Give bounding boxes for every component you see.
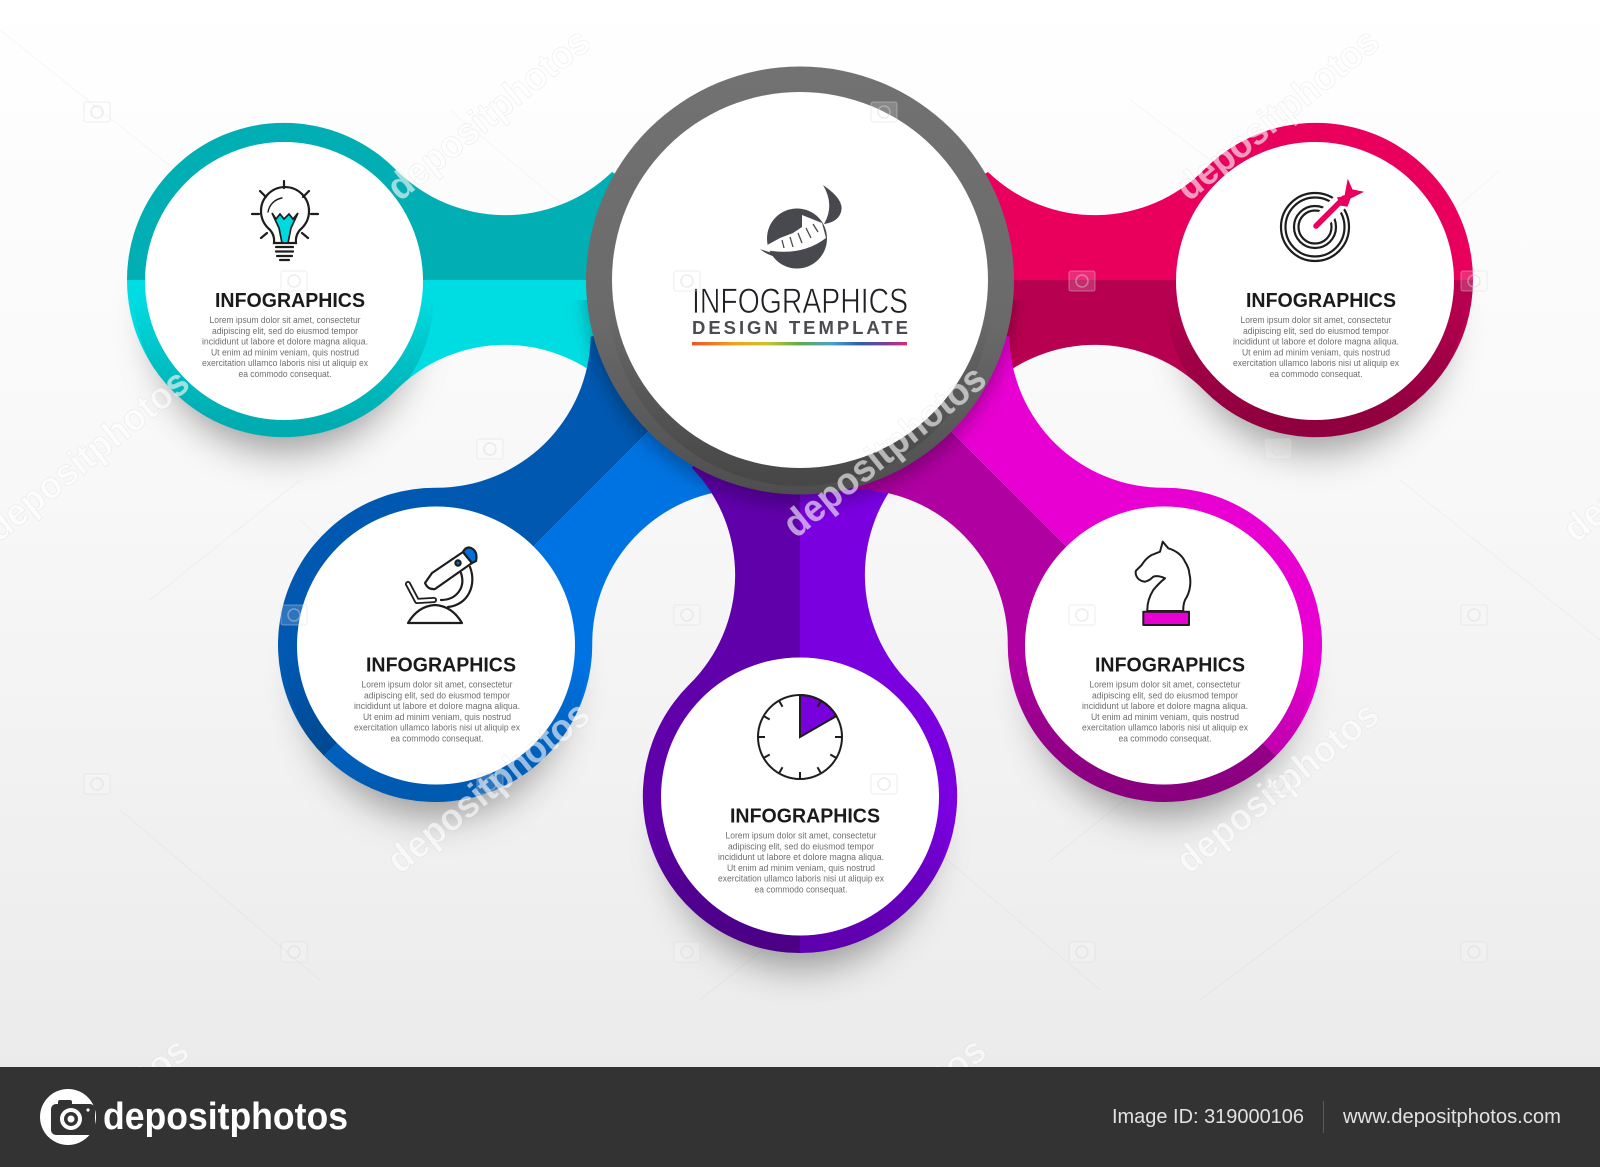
purple white disc	[661, 658, 939, 936]
magenta white disc	[1025, 506, 1303, 784]
footer logo icon	[40, 1089, 96, 1145]
red heading and text: exercitation ullamco laboris nisi ut aliquip ex	[1233, 358, 1399, 369]
icon: chess knight	[1136, 542, 1190, 625]
blue heading and text: Lorem ipsum dolor sit amet, consectetur	[362, 680, 513, 690]
purple heading and text: INFOGRAPHICS	[730, 804, 880, 828]
purple heading and text: exercitation ullamco laboris nisi ut aliquip ex	[718, 874, 884, 885]
icon: light bulb	[252, 181, 318, 260]
icon: logo sphere	[760, 185, 842, 268]
teal white disc	[145, 142, 423, 420]
icon: microscope	[408, 548, 476, 623]
teal heading and text: ea commodo consequat.	[238, 369, 332, 380]
magenta heading and text: adipiscing elit, sed do eiusmod tempor	[1092, 690, 1239, 701]
magenta heading and text: ea commodo consequat.	[1118, 734, 1212, 744]
teal heading and text: Lorem ipsum dolor sit amet, consectetur	[210, 315, 361, 326]
hub grey ring	[586, 66, 1014, 494]
footer site url: www.depositphotos.com	[1342, 1106, 1561, 1128]
blue heading and text: adipiscing elit, sed do eiusmod tempor	[364, 690, 511, 701]
hub subtitle: DESIGN TEMPLATE	[692, 317, 908, 338]
magenta heading and text: Ut enim ad minim veniam, quis nostrud	[1091, 712, 1239, 723]
red heading and text	[1233, 289, 1399, 380]
blue heading and text	[354, 654, 520, 744]
teal heading and text	[202, 289, 368, 380]
red connector and ring	[800, 123, 1473, 437]
magenta connector and ring	[689, 169, 1387, 867]
red heading and text: ea commodo consequat.	[1270, 369, 1362, 380]
blue white disc	[297, 506, 575, 784]
watermark: camera icons	[84, 102, 1487, 962]
magenta heading and text: exercitation ullamco laboris nisi ut aliquip ex	[1082, 723, 1248, 734]
magenta heading and text: Lorem ipsum dolor sit amet, consectetur	[1090, 680, 1241, 690]
hub title: INFOGRAPHICS	[692, 282, 908, 321]
purple heading and text: adipiscing elit, sed do eiusmod tempor	[728, 841, 875, 852]
panel: central hub	[584, 66, 1016, 506]
magenta heading and text: INFOGRAPHICS	[1095, 654, 1245, 676]
hub white disc	[612, 92, 988, 468]
purple connector and ring	[643, 280, 957, 953]
footer image id: Image ID: 319000106	[1112, 1106, 1304, 1128]
blue heading and text: incididunt ut labore et dolore magna aliqua.	[354, 701, 520, 712]
panel: magenta step	[856, 336, 1322, 802]
blue heading and text: INFOGRAPHICS	[366, 654, 516, 676]
panel: blue step	[278, 336, 712, 802]
icon: target with arrow	[1281, 181, 1362, 261]
teal heading and text: exercitation ullamco laboris nisi ut aliquip ex	[202, 358, 368, 369]
teal heading and text: adipiscing elit, sed do eiusmod tempor	[212, 326, 359, 337]
red heading and text: Lorem ipsum dolor sit amet, consectetur	[1240, 315, 1392, 326]
red heading and text: Ut enim ad minim veniam, quis nostrud	[1242, 347, 1390, 358]
blue connector and ring	[213, 169, 911, 867]
icon: clock with wedge	[758, 695, 842, 779]
footer bar	[0, 1067, 1600, 1167]
red heading and text: adipiscing elit, sed do eiusmod tempor	[1243, 326, 1390, 337]
purple heading and text: Ut enim ad minim veniam, quis nostrud	[727, 863, 875, 874]
blue heading and text: ea commodo consequat.	[390, 734, 484, 744]
purple heading and text	[718, 804, 884, 896]
teal connector and ring	[127, 123, 800, 437]
purple heading and text: ea commodo consequat.	[754, 884, 848, 896]
teal heading and text: Ut enim ad minim veniam, quis nostrud	[211, 347, 359, 358]
footer brand name: depositphotos	[103, 1096, 348, 1138]
watermark: depositphotos text: depositphotos	[379, 693, 598, 882]
teal heading and text: incididunt ut labore et dolore magna aliqua.	[202, 337, 368, 348]
red heading and text: INFOGRAPHICS	[1246, 289, 1396, 312]
panel: purple step	[642, 466, 958, 953]
watermark: depositphotos text: depositphotos	[1168, 693, 1387, 882]
panel: teal step	[127, 122, 615, 438]
teal heading and text: INFOGRAPHICS	[215, 289, 365, 312]
blue heading and text: exercitation ullamco laboris nisi ut aliquip ex	[354, 723, 520, 734]
drop shadows under satellites	[154, 192, 1445, 968]
red heading and text: incididunt ut labore et dolore magna aliqua.	[1233, 337, 1399, 348]
watermark: depositphotos text: depositphotos	[1168, 20, 1387, 209]
magenta heading and text: incididunt ut labore et dolore magna aliqua.	[1082, 701, 1248, 712]
magenta heading and text	[1082, 654, 1248, 744]
watermark: depositphotos text: depositphotos	[379, 20, 598, 209]
purple heading and text: Lorem ipsum dolor sit amet, consectetur	[726, 830, 877, 842]
purple heading and text: incididunt ut labore et dolore magna aliqua.	[718, 852, 884, 863]
watermark: depositphotos text: depositphotos	[775, 357, 994, 546]
panel: red step	[985, 122, 1473, 438]
blue heading and text: Ut enim ad minim veniam, quis nostrud	[363, 712, 511, 723]
red white disc	[1176, 142, 1454, 420]
rainbow underline	[692, 342, 907, 345]
